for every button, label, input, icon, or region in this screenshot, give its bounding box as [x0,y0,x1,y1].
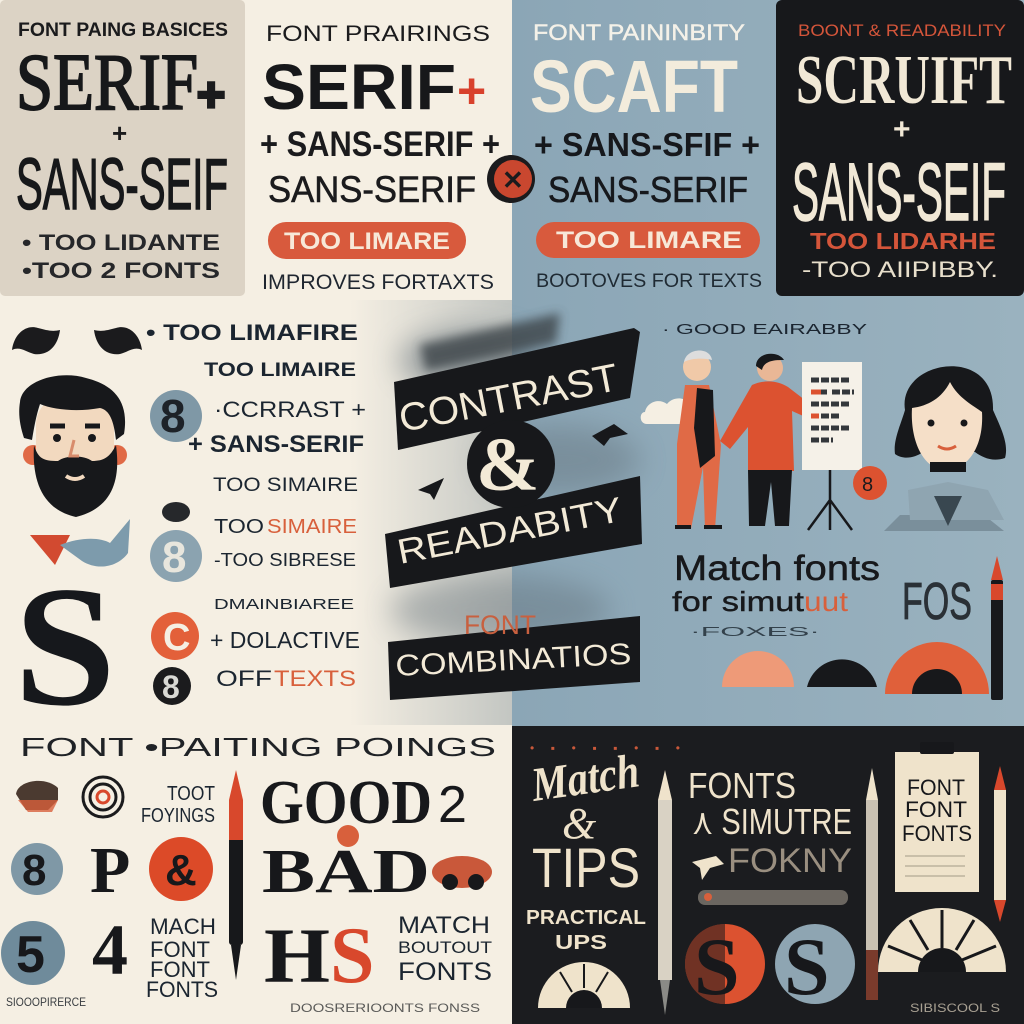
panel: font pairing points: FONT [150,957,210,982]
panel: too limaire list: + SANS-SERIF [188,431,364,458]
flip chart [802,362,862,530]
icon: pen [229,770,243,980]
heading: BOONT & READABILITY [798,21,1006,40]
heading: · GOOD EAIRABBY [662,321,867,338]
sans-serif lines: + SANS-SERIF + [260,125,500,164]
red pill [536,222,760,258]
panel: script and sans-serif dark: + [893,113,911,146]
icon: moustache pair [12,327,142,354]
icons: number grid: 5 [16,926,45,984]
panel: font paininbity [530,20,762,292]
icon: centre red circle [487,155,535,203]
icon: spiral [83,777,123,817]
decorative top marks: • ▪ • ▪ ▪ • ▪ • [530,741,680,755]
small lines: TOO LIDARHE [810,228,996,254]
ribbon: readabity: READABITY [394,490,625,572]
panel: too limaire list: DMAINBIAREE [214,596,354,613]
panel: font pairing points: FONT [150,937,210,962]
icons: number grid: 8 [22,846,46,895]
list text: • TOO LIMAFIRE [146,320,358,345]
icons: big s circles: S [694,921,740,1012]
serif title: SERIF [16,39,198,127]
panel: font pairing points: BOUTOUT [398,938,492,957]
panel: font pairings: TOO LIMARE [284,228,450,255]
note card: FONTS [902,821,972,846]
panel: too limaire list: -TOO SIBRESE [214,550,356,570]
icon: numeral badges [150,390,202,705]
good title: GOOD [260,769,432,837]
icon: pen [991,556,1003,700]
caption: SIBISCOOL S [910,1001,1000,1015]
caption: IMPROVES FORTAXTS [262,271,494,294]
red plus: + [457,63,486,119]
faint caption: ·FOXES· [690,624,820,639]
icon: numeral badges: 8 [162,669,180,705]
ampersand circle: & [476,423,539,507]
icon: bird shape [30,519,130,567]
icon: red dot and scribble [337,825,359,847]
icons: number grid: 4 [92,910,128,990]
panel: font pairing points [1,732,496,1015]
panel: script and sans-serif dark [776,0,1024,296]
hs title: H [264,912,330,999]
panel: too limaire list: TEXTS [274,666,356,691]
match font fonts: MACH [150,914,216,939]
heading: FONT PAING BASICES [18,20,228,41]
heading: FONT •PAITING POINGS [20,732,496,762]
panel: too limaire list: SIMAIRE [267,516,357,538]
heading: FONT PRAIRINGS [266,21,490,46]
panel: font pairings [260,21,500,294]
icons: big s circles: S [784,921,830,1012]
panel: font paininbity: SANS-SERIF [548,169,748,210]
banner: contrast and readability [385,313,642,700]
panel: practical tips dark: UPS [555,932,607,954]
icon: cloud [641,398,702,424]
icons: number grid [1,834,213,990]
badge: font combinations: FONT [464,610,536,640]
panel: too limaire list: + DOLACTIVE [210,627,360,653]
panel: font pairing points: FOYINGS [141,805,215,827]
panel: too limaire list: TOO LIMAIRE [204,360,356,381]
panel: script and sans-serif dark: -TOO AIIPIBBY. [802,257,998,282]
sans-serif title: SANS-SEIF [16,145,228,225]
ampersand circle [467,420,555,508]
icon: orange circle [853,466,887,500]
panel: practical tips dark: TIPS [532,836,640,899]
panel: font pairing points: FONTS [398,958,492,986]
caption: SIOOOPIRERCE [6,995,86,1009]
panel: too limaire list: TOO [214,516,264,538]
icon: centre red circle: ✕ [502,165,524,195]
icon: FOS lettering: FOS [902,573,972,631]
icon: fan [878,908,1006,972]
plus icon: ✚ [196,75,226,116]
icon: pencil left [658,770,672,1015]
note card [895,742,979,892]
panel: practical tips dark: & [562,799,597,848]
icons: number grid: & [165,846,197,895]
small arrows [418,478,444,500]
panel: font pairing points: FONTS [146,977,218,1002]
heading: FONT PAININBITY [533,20,745,45]
ribbon: contrast [394,328,640,450]
ribbon: contrast: CONTRAST [396,356,622,441]
small lines: • TOO LIDANTE [22,230,220,255]
panel: font pairing basics: •TOO 2 FONTS [22,258,220,283]
panel: font pairing points: 2 [438,776,467,834]
match fonts text: Match fonts [674,549,880,588]
serif title: SERIF [262,51,456,123]
match fonts caption: MATCH [398,912,490,939]
panel: too limaire list [12,320,366,691]
panel: too limaire list: TOO SIMAIRE [213,475,358,496]
badge: font combinations: COMBINATIOS [395,638,632,683]
caption: BOOTOVES FOR TEXTS [536,271,762,292]
panel: too limaire list: ·CCRRAST + [214,397,366,422]
icon: pencil right [994,766,1006,922]
icon: pencil middle [866,768,878,1000]
panel: good readability illustration: for simut [672,586,804,617]
panel: font pairing points: DOOSRERIOONTS FONSS [290,1001,480,1015]
panel: font pairing points: S [330,912,374,1000]
panel: practical tips dark [526,741,1006,1015]
panel: font pairing basics [0,0,245,296]
match and tips title: Match [527,744,642,812]
panel: good readability illustration: uut [804,586,848,617]
panel: font pairing basics: + [112,118,127,148]
figure: woman [675,350,722,529]
brush shadow [390,313,640,644]
icons: number grid: P [90,834,130,907]
icon: numeral badges: C [163,617,190,659]
panel: too limaire list: OFF [216,666,272,691]
icon: half fan [538,962,630,1008]
panel: practical tips dark: ⋏ SIMUTRE [692,801,852,842]
icon: hat [16,781,58,812]
panel: font pairings: SANS-SERIF [268,169,476,210]
figure: man [720,354,814,526]
panel: good readability illustration [641,321,1006,700]
note card: FONT [907,775,965,800]
scaft title: SCAFT [530,45,738,128]
bad title: BAD [262,838,430,906]
icon: numeral badges: 8 [160,390,186,442]
icon: orange circle: 8 [862,474,873,496]
big serif S: S [14,552,116,742]
blurred line: FOKNY [728,842,852,880]
icon: numeral badges: 8 [162,533,186,582]
note card: FONT [905,797,967,822]
fonts title: FONTS [688,765,796,806]
practical ups: PRACTICAL [526,907,646,929]
ribbon: readabity [385,476,642,588]
small pill [698,890,848,905]
sans-serif lines: + SANS-SFIF + [534,126,760,163]
badge: font combinations [388,610,640,700]
icon: half-circle fans [722,642,989,694]
portrait: woman [884,366,1006,531]
icon: bearded man [19,375,127,517]
small label: TOOT [167,783,215,805]
icon: small bird [692,856,724,880]
panel: font paininbity: TOO LIMARE [556,227,742,254]
icons: big s circles [685,921,855,1012]
red pill [268,222,466,259]
